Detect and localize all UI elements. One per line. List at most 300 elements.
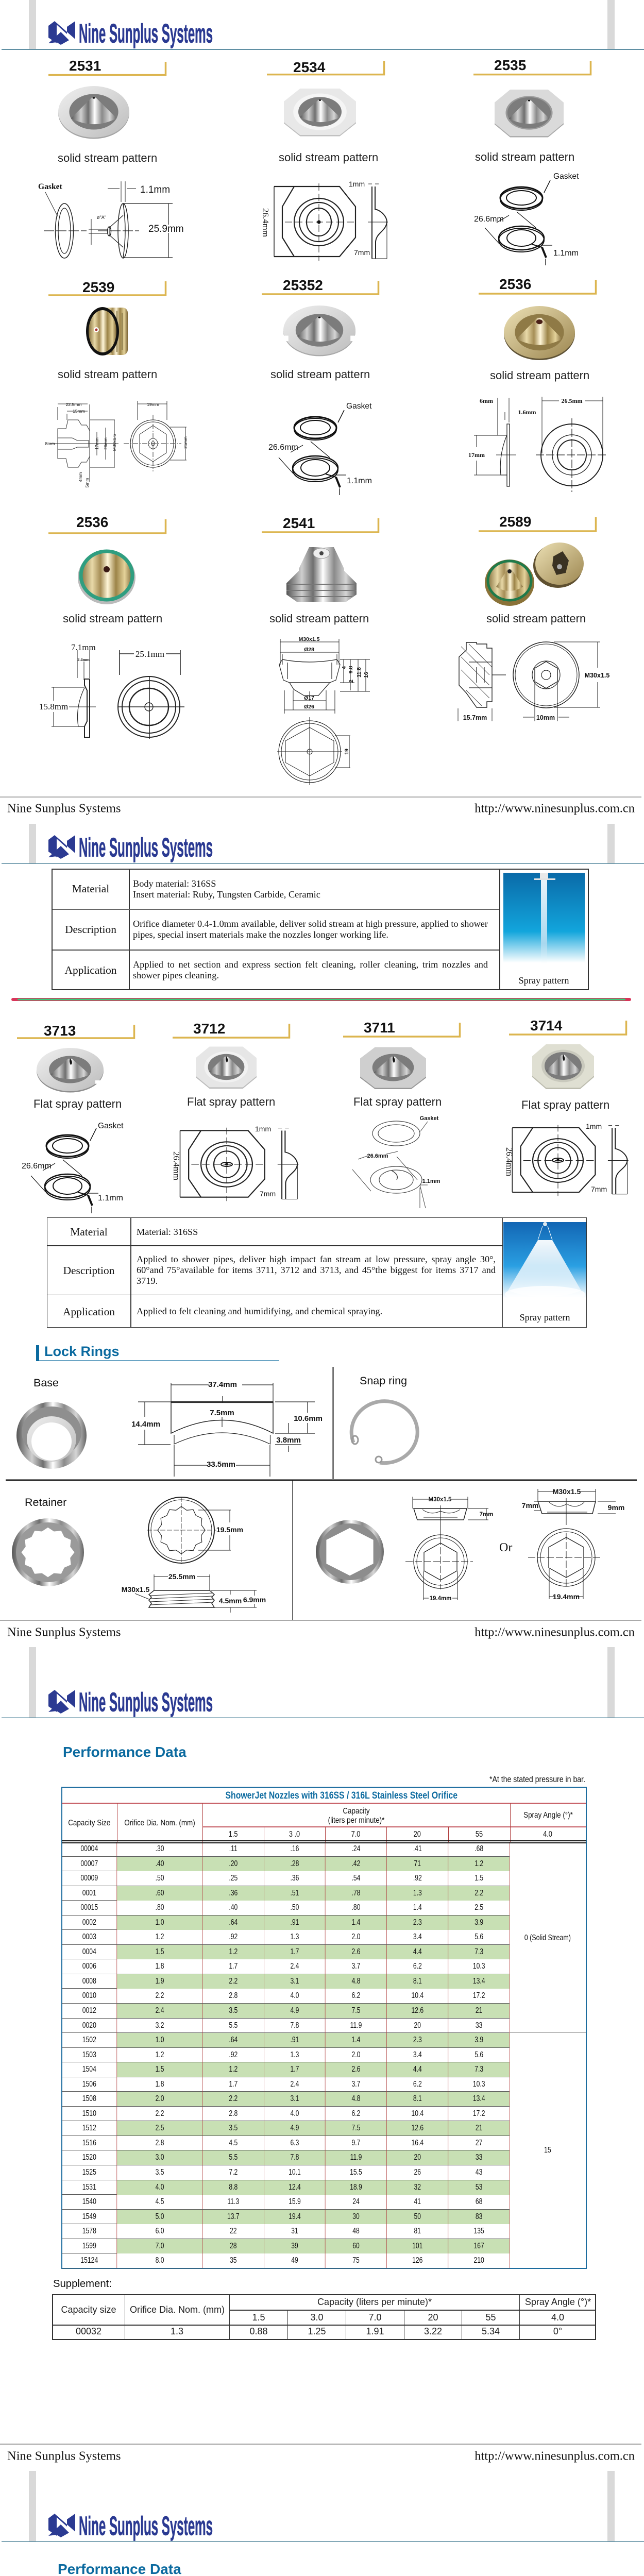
data rows: .30 <box>156 1844 164 1853</box>
diagram: 2534: 7mm <box>354 248 370 257</box>
diagram: 2536 second: 15.8mm <box>39 702 68 711</box>
data rows: 2.2 <box>229 1977 238 1986</box>
data row 00032: 1.91 <box>366 2326 384 2336</box>
data rows: 167 <box>474 2242 484 2250</box>
heading 25352: 25352 <box>283 277 323 293</box>
page header 2 <box>2 824 644 864</box>
data rows: 22 <box>230 2227 237 2235</box>
diagram: 2534: 1mm <box>349 180 365 188</box>
data rows: 6.2 <box>352 2109 360 2118</box>
data rows: 5.0 <box>156 2212 164 2221</box>
data rows <box>62 1842 510 2268</box>
data rows: .54 <box>352 1874 360 1883</box>
data row 00032: 1.3 <box>171 2326 183 2336</box>
data rows: 24 <box>352 2197 360 2206</box>
diagram: 2536: 17mm <box>468 451 485 459</box>
diagram: retainer: 4.5mm <box>219 1597 242 1605</box>
data rows: 13.4 <box>473 2094 485 2103</box>
diagram: hex retainer option 1: 19.4mm <box>430 1596 451 1602</box>
photo: nozzle 2539 <box>86 307 128 355</box>
diagram: 2541: 2 <box>348 680 354 683</box>
diagram: hex retainer option 2 <box>522 1487 624 1601</box>
header: orifice: Orifice Dia. Nom. (mm) <box>130 2304 225 2315</box>
data rows: 2.0 <box>352 1933 360 1941</box>
data row 00032: 5.34 <box>482 2326 500 2336</box>
data rows: 32 <box>414 2183 421 2192</box>
diagram: hex retainer option 2: 9mm <box>608 1503 624 1512</box>
text: application details: Applied to net section and express section felt cleaning, roller cleaning, trim nozzles and shower pipes cleaning. <box>133 959 488 980</box>
data rows: 10.4 <box>411 1991 423 2000</box>
header: capacity: Capacity <box>343 1807 369 1816</box>
heading: Lock Rings: Lock Rings <box>44 1344 120 1359</box>
data row 00032: 0° <box>553 2326 562 2336</box>
row: Material: Material <box>72 883 109 895</box>
photo: nozzle 3713 <box>37 1048 104 1093</box>
data rows: .42 <box>352 1859 360 1868</box>
heading 2536 second <box>48 514 166 533</box>
data rows: 3.4 <box>413 1933 422 1941</box>
data rows: 1.8 <box>156 1962 164 1971</box>
heading 2541 <box>262 515 378 532</box>
data rows: 28 <box>230 2242 237 2250</box>
data rows: 2.4 <box>291 1962 299 1971</box>
data rows: 11.3 <box>227 2197 239 2206</box>
data rows: 3.1 <box>291 2094 299 2103</box>
diagram: 3711: 26.6mm <box>367 1153 388 1159</box>
page header 4 <box>2 2471 644 2542</box>
header: capacity: (liters per minute)* <box>328 1816 384 1825</box>
caption: 3713: Flat spray pattern <box>33 1097 122 1110</box>
diagram: 2539: 26mm <box>103 437 108 450</box>
data row 00032 <box>76 2326 562 2336</box>
page header 3: Nine Sunplus Systems <box>79 1688 213 1718</box>
data rows: .36 <box>291 1874 299 1883</box>
spray angle: solid stream: 0 (Solid Stream) <box>524 1933 571 1942</box>
diagram: base ring: 10.6mm <box>294 1414 323 1423</box>
caption: 2531: solid stream pattern <box>58 151 157 164</box>
data rows: .50 <box>291 1903 299 1912</box>
header: pressures: 4.0 <box>551 2312 564 2323</box>
header: pressures: 4.0 <box>544 1830 552 1839</box>
diagram: hex retainer option 1: 7mm <box>480 1512 493 1518</box>
diagram: 2539: 4mm <box>78 472 83 482</box>
data rows: 81 <box>414 2227 421 2235</box>
diagram: 2531 <box>38 181 184 258</box>
data rows: 1.7 <box>229 2080 238 2089</box>
caption: 2541: solid stream pattern <box>269 612 369 625</box>
data rows: 2.4 <box>291 2080 299 2089</box>
data rows: 43 <box>476 2168 482 2177</box>
header: pressures: 20 <box>414 1830 421 1839</box>
diagram: base ring: 3.8mm <box>276 1436 301 1445</box>
data rows: 1.0 <box>156 2036 164 2044</box>
heading: Performance Data 1: Performance Data <box>63 1744 187 1760</box>
data rows: 4.8 <box>352 2094 360 2103</box>
page header 1: Nine Sunplus Systems <box>79 19 213 48</box>
row: Application: Application <box>63 1306 115 1318</box>
data rows: 19.4 <box>289 2212 301 2221</box>
diagram: hex retainer option 2: M30x1.5 <box>553 1487 581 1496</box>
diagram: 2541: Ø28 <box>304 647 314 653</box>
diagram: base ring: 14.4mm <box>131 1420 160 1429</box>
photo: nozzle 2531 <box>58 86 129 139</box>
diagram: 2539: 5mm <box>84 478 90 487</box>
data rows: 26 <box>414 2168 421 2177</box>
diagram: 2541: Ø17 <box>304 695 314 701</box>
data rows: 2.0 <box>156 2094 164 2103</box>
data rows: 0020 <box>82 2021 96 2030</box>
data rows: 6.2 <box>413 1962 422 1971</box>
data rows: 5.5 <box>229 2153 238 2162</box>
header: pressures: 55 <box>485 2312 496 2323</box>
data rows: .80 <box>156 1903 164 1912</box>
photo: hex retainer <box>316 1520 384 1584</box>
row: Material: Material <box>70 1226 108 1238</box>
header: pressures: 55 <box>475 1830 483 1839</box>
row: Description: Description <box>65 923 116 936</box>
data rows: 1599 <box>82 2242 96 2250</box>
logo <box>48 1688 213 1718</box>
header: pressures: 3.0 <box>310 2312 324 2323</box>
diagram: 2534: 26.4mm <box>261 208 270 237</box>
data rows: .36 <box>229 1889 238 1897</box>
data rows: 3.7 <box>352 1962 360 1971</box>
diagram: 2535 <box>474 172 579 265</box>
data rows: 1516 <box>82 2139 96 2147</box>
diagram: hex retainer option 1 <box>405 1497 493 1602</box>
data rows: 49 <box>291 2256 298 2265</box>
data rows: 9.7 <box>352 2139 360 2147</box>
header: capacity size: Capacity size <box>61 2304 116 2315</box>
spray pattern image: solid stream <box>503 873 585 971</box>
page footer 1 <box>0 796 641 815</box>
diagram: 2541: M30x1.5 <box>299 636 320 642</box>
info table: solid stream nozzles <box>52 869 589 990</box>
data rows: 1531 <box>82 2183 96 2192</box>
data rows: 18.9 <box>350 2183 362 2192</box>
diagram: 2536: 1.6mm <box>518 409 536 416</box>
data rows: 10.3 <box>473 1962 485 1971</box>
data rows: 1.9 <box>156 1977 164 1986</box>
data rows: 12.6 <box>411 2124 423 2132</box>
data rows: 35 <box>230 2256 237 2265</box>
page footer 2 <box>0 1620 641 1639</box>
diagram: 2589: 15.7mm <box>463 714 487 721</box>
logo <box>48 2511 213 2541</box>
data rows: 1502 <box>82 2036 96 2044</box>
data rows: 3.4 <box>413 2050 422 2059</box>
diagram: 2536: 26.5mm <box>562 397 582 404</box>
diagram: hex retainer option 2: 7mm <box>522 1501 538 1510</box>
data rows: .41 <box>413 1844 422 1853</box>
data rows: .78 <box>352 1889 360 1897</box>
photo: retainer ring <box>12 1518 84 1586</box>
data rows: 2.3 <box>413 2036 422 2044</box>
caption: 3714: Flat spray pattern <box>521 1098 609 1111</box>
data rows: 4.0 <box>156 2183 164 2192</box>
diagram: 2535: 1.1mm <box>553 249 579 258</box>
data rows: .92 <box>413 1874 422 1883</box>
data rows: 17.2 <box>473 2109 485 2118</box>
caption: 2536 second: solid stream pattern <box>63 612 162 625</box>
diagram: 3713: 1.1mm <box>98 1194 123 1202</box>
heading 2534 <box>267 59 384 75</box>
data rows: .40 <box>156 1859 164 1868</box>
photo: nozzle 3712 <box>196 1047 257 1089</box>
diagram: 25352: 26.6mm <box>268 443 298 452</box>
diagram: hex retainer option 2: 19.4mm <box>553 1592 580 1601</box>
diagram: 3714 <box>504 1122 629 1196</box>
heading 3711 <box>343 1020 460 1037</box>
data rows: .24 <box>352 1844 360 1853</box>
data rows: 4.5 <box>156 2197 164 2206</box>
data rows: 10.3 <box>473 2080 485 2089</box>
diagram: 2531: 25.9mm <box>148 224 184 234</box>
panel dividers <box>6 1367 637 1620</box>
heading 2531: 2531 <box>69 58 101 74</box>
data rows: 1.7 <box>291 1947 299 1956</box>
diagram: 2535: Gasket <box>553 172 579 181</box>
data rows: 0008 <box>82 1977 96 1986</box>
header: pressures: 7.0 <box>351 1830 360 1839</box>
data rows: 50 <box>414 2212 421 2221</box>
text: material details <box>133 878 320 900</box>
heading 3712 <box>173 1021 290 1038</box>
data rows: 2.4 <box>156 2006 164 2015</box>
diagram: 2536 second: 7.1mm <box>71 642 96 652</box>
data rows: 75 <box>352 2256 360 2265</box>
caption: 25352: solid stream pattern <box>270 368 370 381</box>
data rows: 1.4 <box>352 2036 360 2044</box>
data rows: 4.0 <box>291 1991 299 2000</box>
photo: nozzle 3714 <box>532 1044 594 1089</box>
label: Snap ring: Snap ring <box>360 1375 407 1387</box>
data rows: 1540 <box>82 2197 96 2206</box>
diagram: retainer: 6.9mm <box>243 1596 266 1604</box>
data rows: .28 <box>291 1859 299 1868</box>
text: description details: Applied to shower pipes, deliver high impact fan stream at low pressure, spray angle 30°, 60°and 75°available for items 3711, 3712 and 3713, and 45°the biggest for items 3717 and 3719. <box>137 1254 496 1286</box>
data rows: .64 <box>229 1918 238 1927</box>
heading 3711: 3711 <box>364 1020 395 1036</box>
text: application details: Applied to felt cleaning and humidifying, and chemical spraying. <box>137 1306 382 1316</box>
photo: nozzle 2535 <box>495 90 564 138</box>
data rows: 15124 <box>80 2256 98 2265</box>
data rows: 1.4 <box>352 1918 360 1927</box>
data rows: 1.5 <box>156 2065 164 2074</box>
diagram: retainer: 25.5mm <box>168 1572 195 1581</box>
data rows: .60 <box>156 1889 164 1897</box>
data rows: 0006 <box>82 1962 96 1971</box>
data rows: 15.9 <box>289 2197 301 2206</box>
data rows: 3.0 <box>156 2153 164 2162</box>
data rows: 6.0 <box>156 2227 164 2235</box>
diagram: 2541: 4 <box>341 666 347 669</box>
diagram: 2536 second <box>39 642 184 739</box>
diagram: 3714: 26.4mm <box>504 1147 514 1176</box>
data rows: .25 <box>229 1874 238 1883</box>
data rows: 1549 <box>82 2212 96 2221</box>
caption: 2534: solid stream pattern <box>279 151 378 164</box>
diagram: retainer <box>122 1497 266 1613</box>
heading 3714 <box>509 1018 626 1035</box>
diagram: 2531: Gasket <box>38 182 63 191</box>
diagram: 2531: ø"A" <box>97 215 106 220</box>
diagram: 2531: 1.1mm <box>140 184 170 195</box>
data rows: 8.0 <box>156 2256 164 2265</box>
diagram: 25352: Gasket <box>346 402 372 411</box>
heading 2541: 2541 <box>283 515 315 531</box>
data rows: 4.9 <box>291 2006 299 2015</box>
heading 25352 <box>262 277 378 294</box>
photo: nozzle 2536 brass <box>504 306 575 360</box>
data rows: 4.9 <box>291 2124 299 2132</box>
data rows: 12.4 <box>289 2183 301 2192</box>
diagram: 2536 <box>468 397 608 492</box>
data rows: 6.2 <box>352 1991 360 2000</box>
data rows: 1578 <box>82 2227 96 2235</box>
data rows: 5.6 <box>474 1933 483 1941</box>
data rows: .16 <box>291 1844 299 1853</box>
data rows: 31 <box>291 2227 298 2235</box>
spray angle: solid stream <box>510 1843 585 2033</box>
data rows: 1520 <box>82 2153 96 2162</box>
diagram: 2539: 17mm <box>94 437 99 450</box>
data rows: 5.6 <box>474 2050 483 2059</box>
data rows: 0003 <box>82 1933 96 1941</box>
data rows: 8.1 <box>413 1977 422 1986</box>
data rows: 48 <box>352 2227 360 2235</box>
page footer 2: Nine Sunplus Systems <box>7 1625 121 1639</box>
diagram: 2541: Ø26 <box>304 704 314 710</box>
text: material details: Insert material: Ruby, Tungsten Carbide, Ceramic <box>133 889 320 900</box>
data rows: 1510 <box>82 2109 96 2118</box>
data rows: 30 <box>352 2212 360 2221</box>
diagram: 2539: 8mm <box>45 441 55 446</box>
page header 2: Nine Sunplus Systems <box>79 833 213 862</box>
row: Description: Description <box>63 1264 114 1277</box>
diagram: 2541 <box>277 636 370 785</box>
data rows: .68 <box>474 1844 483 1853</box>
caption: 2539: solid stream pattern <box>58 368 157 381</box>
data rows: 1504 <box>82 2065 96 2074</box>
data rows: 4.0 <box>291 2109 299 2118</box>
row: Application: Application <box>65 964 116 976</box>
header: spray angle: Spray Angle (°)* <box>523 1811 572 1820</box>
caption: spray pattern: Spray pattern <box>519 1312 570 1323</box>
diagram: 2536 second: 2.4mm <box>77 657 90 662</box>
performance table 1 <box>62 1787 586 2268</box>
diagram: retainer: 19.5mm <box>216 1526 243 1534</box>
page footer 1: http://www.ninesunplus.com.cn <box>474 802 635 815</box>
spray angle: 15: 15 <box>544 2146 551 2155</box>
data rows: 2.0 <box>352 2050 360 2059</box>
data rows: 1512 <box>82 2124 96 2132</box>
data rows: 2.2 <box>474 1889 483 1897</box>
table title: ShowerJet Nozzles with 316SS / 316L Stainless Steel Orifice <box>225 1790 457 1801</box>
data rows: 7.8 <box>291 2153 299 2162</box>
data rows: 13.4 <box>473 1977 485 1986</box>
data rows: 4.4 <box>413 2065 422 2074</box>
diagram: 3712: 7mm <box>260 1190 276 1198</box>
diagram: 2536: 6mm <box>480 397 493 404</box>
data rows: 15.5 <box>350 2168 362 2177</box>
data rows: 135 <box>474 2227 484 2235</box>
header: pressures: 7.0 <box>368 2312 382 2323</box>
diagram: 3711 <box>352 1115 440 1208</box>
heading 2536 second: 2536 <box>76 514 108 530</box>
heading 2589: 2589 <box>499 514 531 530</box>
photo: snap ring <box>351 1401 417 1463</box>
supplement table <box>52 2294 596 2340</box>
data rows: 210 <box>474 2256 484 2265</box>
data rows: 2.8 <box>156 2139 164 2147</box>
data rows: 0012 <box>82 2006 96 2015</box>
data rows: 68 <box>476 2197 482 2206</box>
diagram: 2539: 21mm <box>183 436 188 449</box>
diagram: 25352: 1.1mm <box>347 477 372 485</box>
caption: 3711: Flat spray pattern <box>353 1095 442 1108</box>
heading 3714: 3714 <box>530 1018 563 1033</box>
data rows: 6.2 <box>413 2080 422 2089</box>
data rows: 00009 <box>80 1874 98 1883</box>
header: pressures <box>252 2312 564 2323</box>
heading: Lock Rings <box>36 1344 279 1361</box>
data rows: 2.2 <box>156 1991 164 2000</box>
header: pressures: 1.5 <box>252 2312 265 2323</box>
data row 00032: 00032 <box>76 2326 101 2336</box>
data rows: 2.8 <box>229 1991 238 2000</box>
data rows: 00007 <box>80 1859 98 1868</box>
caption: 2589: solid stream pattern <box>486 612 586 625</box>
data rows: 71 <box>414 1859 421 1868</box>
data rows: .51 <box>291 1889 299 1897</box>
diagram: 3712: 26.4mm <box>172 1151 181 1180</box>
data rows: .80 <box>352 1903 360 1912</box>
data rows: 2.6 <box>352 1947 360 1956</box>
divider: colored line <box>11 998 631 1001</box>
data rows: 1.2 <box>156 1933 164 1941</box>
data rows: .20 <box>229 1859 238 1868</box>
diagram: 3713: 26.6mm <box>22 1162 52 1171</box>
heading 2535: 2535 <box>494 57 526 73</box>
diagram: hex retainer option 1: M30x1.5 <box>429 1497 452 1503</box>
data rows: 21 <box>476 2006 482 2015</box>
data rows: 4.8 <box>352 1977 360 1986</box>
data rows: 1.3 <box>291 2050 299 2059</box>
text: description details: Orifice diameter 0.4-1.0mm available, deliver solid stream at high pressure, applied to shower pipes, special insert materials make the nozzles longer working life. <box>133 919 488 940</box>
header: pressures: 3 .0 <box>289 1830 300 1839</box>
diagram: 3711: Gasket <box>420 1115 439 1122</box>
diagram: 2539: 22.5mm <box>66 402 81 407</box>
heading 3713: 3713 <box>44 1023 76 1039</box>
diagram: 2541: 11.8 <box>356 667 362 677</box>
data rows: .92 <box>229 1933 238 1941</box>
diagram: 2534 <box>261 180 388 261</box>
data rows: 27 <box>476 2139 482 2147</box>
data rows: 83 <box>476 2212 482 2221</box>
diagram: 2539: 15mm <box>73 409 85 414</box>
photo: nozzle 2541 <box>286 547 357 602</box>
data rows: 1.0 <box>156 1918 164 1927</box>
photo: nozzle 3711 <box>360 1047 426 1089</box>
data rows: 16.4 <box>411 2139 423 2147</box>
data rows: 1.2 <box>474 1859 483 1868</box>
data rows: 11.9 <box>350 2153 362 2162</box>
data rows: 1.7 <box>229 1962 238 1971</box>
data rows: 0004 <box>82 1947 96 1956</box>
diagram: 3714: 1mm <box>586 1122 602 1130</box>
header: pressures: 1.5 <box>228 1830 238 1839</box>
